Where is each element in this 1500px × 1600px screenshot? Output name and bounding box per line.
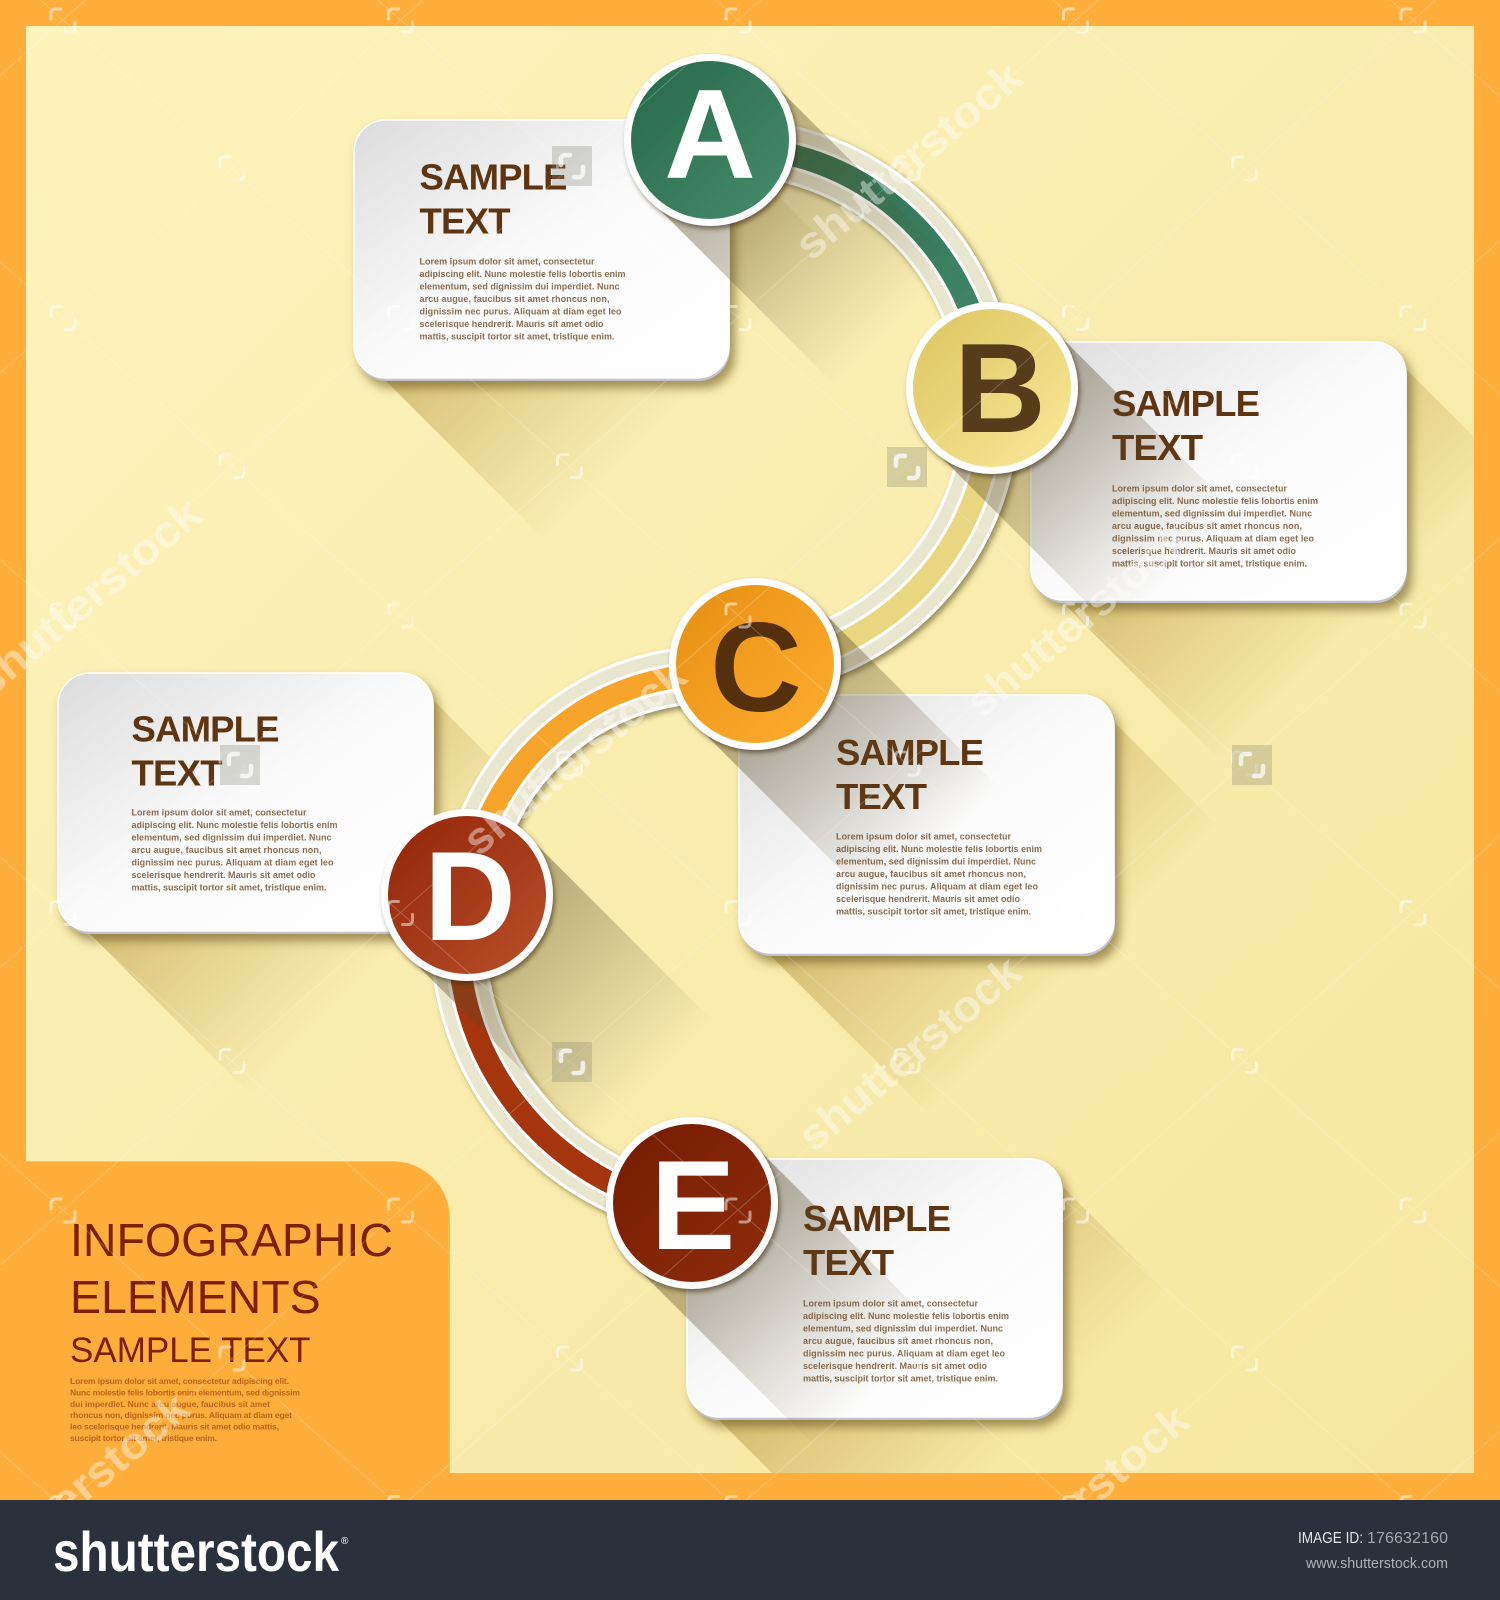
watermark: shutterstock bbox=[786, 52, 1032, 270]
card D body: scelerisque hendrerit. Mauris sit amet odio bbox=[132, 870, 316, 880]
card B body: adipiscing elit. Nunc molestie felis lobortis enim bbox=[1112, 496, 1318, 506]
card D body: dignissim nec purus. Aliquam at diam eget leo bbox=[132, 858, 334, 868]
card E body: adipiscing elit. Nunc molestie felis lobortis enim bbox=[803, 1311, 1009, 1321]
card E bbox=[687, 1159, 1063, 1420]
card D heading: SAMPLE bbox=[132, 708, 280, 750]
arc D to E bbox=[458, 894, 691, 1209]
card B bbox=[1031, 342, 1407, 603]
title: INFOGRAPHIC bbox=[70, 1214, 393, 1266]
watermark: shutterstock bbox=[957, 512, 1199, 727]
card A body: dignissim nec purus. Aliquam at diam eget leo bbox=[420, 306, 622, 316]
footer logo: shutterstock bbox=[53, 1520, 340, 1583]
card B body: scelerisque hendrerit. Mauris sit amet odio bbox=[1112, 546, 1296, 556]
subtitle: SAMPLE TEXT bbox=[70, 1331, 311, 1370]
card D body: adipiscing elit. Nunc molestie felis lobortis enim bbox=[132, 820, 338, 830]
image id number: 176632160 bbox=[1367, 1530, 1448, 1547]
card D body: elementum, sed dignissim dui imperdiet. Nunc bbox=[132, 832, 332, 842]
card B heading: TEXT bbox=[1112, 427, 1203, 468]
card E body: arcu augue, faucibus sit amet rhoncus non, bbox=[803, 1336, 993, 1346]
watermark: shutterstock bbox=[454, 650, 696, 865]
badge C bbox=[669, 578, 841, 750]
card D body: mattis, suscipit tortor sit amet, tristique enim. bbox=[132, 882, 326, 892]
card A heading: SAMPLE bbox=[420, 156, 568, 198]
card B body: dignissim nec purus. Aliquam at diam eget leo bbox=[1112, 534, 1314, 544]
card C body: mattis, suscipit tortor sit amet, tristique enim. bbox=[836, 906, 1031, 916]
card A body: arcu augue, faucibus sit amet rhoncus non, bbox=[420, 294, 610, 304]
card A body: Lorem ipsum dolor sit amet, consectetur bbox=[420, 256, 595, 266]
card D heading: TEXT bbox=[132, 752, 222, 794]
card C body: scelerisque hendrerit. Mauris sit amet odio bbox=[836, 894, 1020, 904]
title panel body: rhoncus non, dignissim nec purus. Aliquam at diam eget bbox=[70, 1410, 292, 1420]
card D body: Lorem ipsum dolor sit amet, consectetur bbox=[132, 808, 307, 818]
arc A to B bbox=[711, 147, 988, 388]
arc B to C bbox=[755, 388, 991, 667]
card D body bbox=[132, 808, 338, 892]
badge D bbox=[381, 809, 553, 981]
image id label: IMAGE ID: bbox=[1298, 1530, 1363, 1547]
badge E: E bbox=[651, 1134, 735, 1276]
card B body: Lorem ipsum dolor sit amet, consectetur bbox=[1112, 484, 1287, 494]
card C body: arcu augue, faucibus sit amet rhoncus non, bbox=[836, 869, 1026, 879]
badge C: C bbox=[710, 596, 802, 738]
card A heading: TEXT bbox=[420, 200, 510, 242]
card E body: scelerisque hendrerit. Mauris sit amet odio bbox=[803, 1361, 988, 1371]
title panel body bbox=[70, 1376, 300, 1443]
title: ELEMENTS bbox=[70, 1271, 321, 1323]
card B body: elementum, sed dignissim dui imperdiet. Nunc bbox=[1112, 508, 1312, 518]
connecting arcs bbox=[458, 147, 991, 1209]
title panel body: suscipit tortor sit amet, tristique enim. bbox=[70, 1433, 217, 1443]
card E body: mattis, suscipit tortor sit amet, tristique enim. bbox=[803, 1374, 998, 1384]
card B body bbox=[1112, 484, 1318, 568]
card C bbox=[739, 695, 1115, 956]
card E body: Lorem ipsum dolor sit amet, consectetur bbox=[803, 1298, 978, 1308]
card D bbox=[58, 673, 434, 934]
watermark: shutterstock bbox=[789, 946, 1031, 1161]
card A body: mattis, suscipit tortor sit amet, tristique enim. bbox=[420, 332, 614, 342]
card E heading: SAMPLE bbox=[803, 1198, 951, 1239]
card E body: dignissim nec purus. Aliquam at diam eget leo bbox=[803, 1348, 1006, 1358]
long card shadows bbox=[90, 196, 1474, 1473]
card B body: mattis, suscipit tortor sit amet, tristique enim. bbox=[1112, 558, 1307, 568]
badge E bbox=[606, 1117, 778, 1289]
badge D: D bbox=[424, 825, 516, 967]
arc C to D bbox=[468, 675, 753, 895]
card C body bbox=[836, 832, 1042, 916]
title panel body: Nunc molestie felis lobortis enim elementum, sed dignissim bbox=[70, 1387, 300, 1397]
website: www.shutterstock.com bbox=[1305, 1555, 1448, 1572]
card B heading: SAMPLE bbox=[1112, 383, 1260, 424]
title panel body: leo scelerisque hendrerit. Mauris sit amet odio mattis, bbox=[70, 1422, 279, 1432]
card E body: elementum, sed dignissim dui imperdiet. Nunc bbox=[803, 1324, 1003, 1334]
badge B bbox=[906, 302, 1078, 474]
card D body: arcu augue, faucibus sit amet rhoncus non, bbox=[132, 845, 322, 855]
badge A: A bbox=[664, 63, 756, 205]
badge A bbox=[624, 54, 796, 226]
card C heading: TEXT bbox=[836, 776, 927, 817]
card A body: elementum, sed dignissim dui imperdiet. Nunc bbox=[420, 282, 620, 292]
registered mark: ® bbox=[341, 1536, 349, 1547]
card C body: adipiscing elit. Nunc molestie felis lobortis enim bbox=[836, 844, 1042, 854]
title panel body: Lorem ipsum dolor sit amet, consectetur adipiscing elit. bbox=[70, 1376, 289, 1386]
card B body: arcu augue, faucibus sit amet rhoncus non, bbox=[1112, 521, 1302, 531]
card A bbox=[354, 120, 730, 381]
card E body bbox=[803, 1298, 1009, 1384]
title panel body: dui imperdiet. Nunc arcu augue, faucibus sit amet bbox=[70, 1399, 270, 1409]
card C body: dignissim nec purus. Aliquam at diam eget leo bbox=[836, 882, 1038, 892]
card C body: Lorem ipsum dolor sit amet, consectetur bbox=[836, 832, 1011, 842]
card A body bbox=[420, 256, 626, 342]
title panel bbox=[0, 1161, 450, 1473]
card C heading: SAMPLE bbox=[836, 732, 984, 773]
card A body: adipiscing elit. Nunc molestie felis lobortis enim bbox=[420, 269, 626, 279]
badge B: B bbox=[954, 317, 1046, 459]
card C body: elementum, sed dignissim dui imperdiet. Nunc bbox=[836, 856, 1036, 866]
card A body: scelerisque hendrerit. Mauris sit amet odio bbox=[420, 319, 604, 329]
long badge shadows bbox=[416, 89, 1222, 1420]
footer bar bbox=[0, 1500, 1500, 1600]
card E heading: TEXT bbox=[803, 1242, 894, 1283]
